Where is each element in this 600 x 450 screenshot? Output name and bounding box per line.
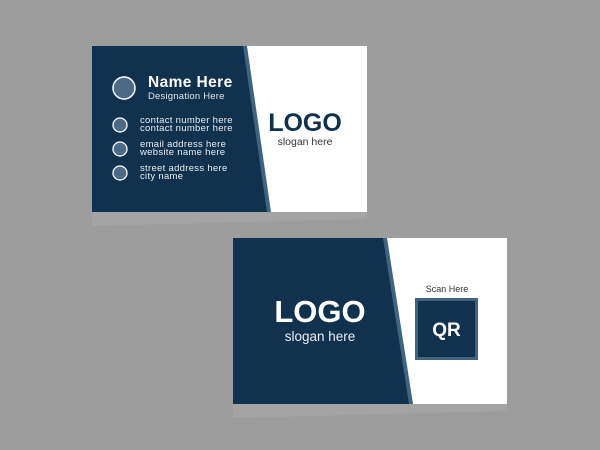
- QR box: [415, 298, 478, 360]
- QR box: QR: [432, 320, 461, 341]
- slogan: slogan here: [285, 329, 355, 344]
- address: street address here: [140, 163, 228, 174]
- icon: email circle: [113, 142, 127, 156]
- address: city name: [140, 171, 183, 182]
- contact numbers: contact number here: [140, 115, 233, 126]
- card shadow reflections: [92, 212, 507, 418]
- icon: address circle: [113, 166, 127, 180]
- icon: phone circle: [113, 118, 127, 132]
- designation: Designation Here: [148, 91, 225, 102]
- email and website: email address here: [140, 139, 226, 150]
- panel: back card: [233, 238, 507, 404]
- heading: name: Name Here: [148, 74, 233, 91]
- icon: profile circle: [113, 77, 135, 99]
- slogan: slogan here: [278, 136, 333, 148]
- logo: LOGO: [268, 109, 342, 137]
- email and website: website name here: [139, 147, 225, 158]
- contact numbers: contact number here: [140, 123, 233, 134]
- logo: LOGO: [274, 294, 366, 329]
- panel: front card: [92, 46, 367, 212]
- scan label: Scan Here: [426, 284, 468, 294]
